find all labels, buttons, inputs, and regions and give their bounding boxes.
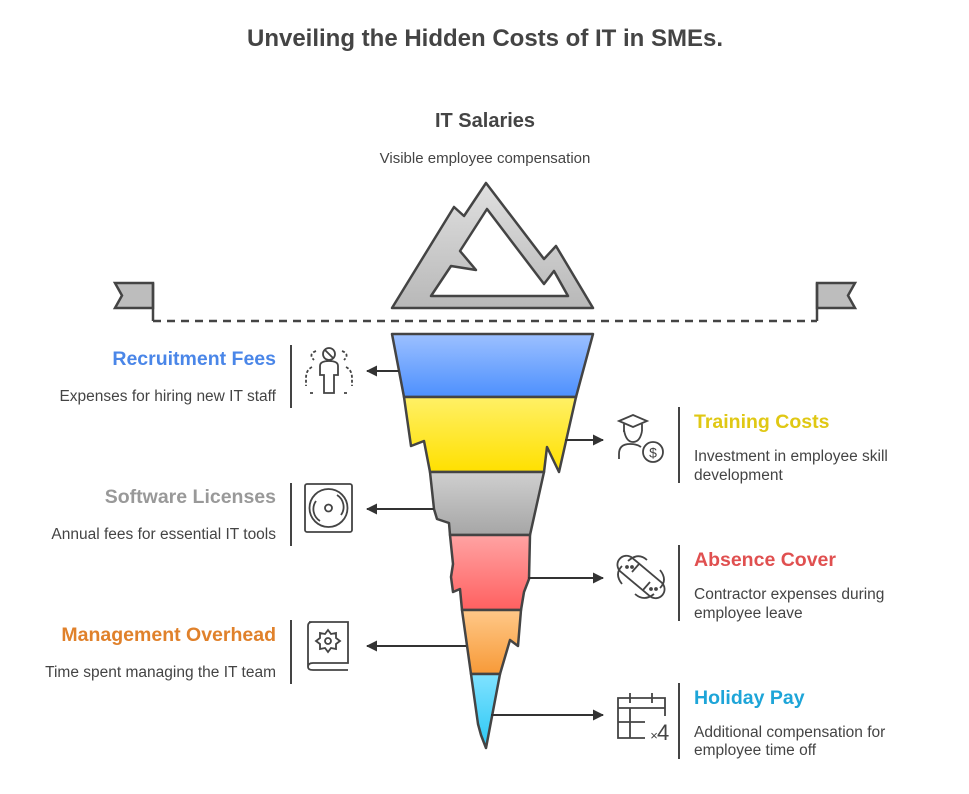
panel: holiday pay: employee time off	[694, 742, 817, 759]
icon: calendar x4: 4	[657, 720, 669, 745]
title: Unveiling the Hidden Costs of IT in SMEs.	[247, 25, 723, 52]
iceberg underwater layers	[392, 334, 593, 748]
arrows	[367, 371, 603, 715]
panel: training costs: Investment in employee skill	[694, 448, 888, 465]
icon: calendar x4	[618, 693, 669, 745]
panel: holiday pay: Additional compensation for	[694, 724, 885, 741]
panel: recruitment fees: Recruitment Fees	[112, 348, 276, 370]
waterline with flags	[115, 283, 855, 321]
icon: graduate with dollar: $	[649, 444, 657, 460]
icon: bandage	[614, 552, 668, 602]
panel: absence cover: employee leave	[694, 605, 803, 622]
panel: software licenses	[51, 486, 276, 543]
panel: absence cover: Contractor expenses during	[694, 586, 884, 603]
icon: book with gear	[308, 622, 348, 670]
panel: training costs: development	[694, 467, 783, 484]
panel: recruitment fees	[59, 348, 277, 405]
panel: management overhead: Management Overhead	[61, 624, 276, 646]
panel: management overhead: Time spent managing the IT team	[45, 664, 276, 681]
panel: management overhead	[45, 624, 276, 681]
panel: software licenses: Annual fees for essential IT tools	[51, 526, 276, 543]
heading: IT Salaries	[380, 110, 590, 167]
panel: training costs	[694, 411, 888, 484]
dividers	[291, 345, 679, 759]
iceberg tip mountain	[392, 183, 593, 308]
heading: IT Salaries: IT Salaries	[435, 110, 535, 132]
icon: people	[306, 348, 352, 393]
icon: calendar x4: ×	[650, 728, 658, 743]
panel: absence cover	[694, 549, 884, 622]
panel: recruitment fees: Expenses for hiring new IT staff	[59, 388, 277, 405]
panel: holiday pay: Holiday Pay	[694, 687, 805, 709]
panel: training costs: Training Costs	[694, 411, 830, 433]
panel: software licenses: Software Licenses	[105, 486, 276, 508]
panel: holiday pay	[694, 687, 885, 759]
icon: disc	[305, 484, 352, 532]
panel: absence cover: Absence Cover	[694, 549, 836, 571]
heading: IT Salaries: Visible employee compensation	[380, 150, 590, 167]
icon: graduate with dollar	[619, 415, 663, 462]
